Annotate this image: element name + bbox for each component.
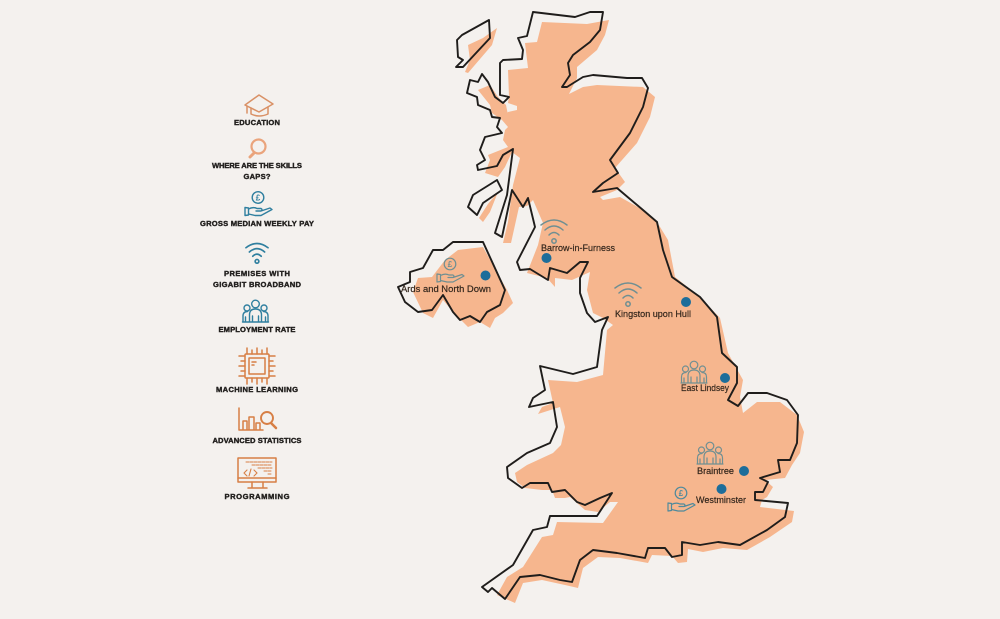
legend item: broadband [213, 244, 302, 289]
location: East Lindsey [681, 361, 730, 394]
legend item: skills gaps: GAPS? [244, 172, 271, 181]
coastline outline [398, 12, 798, 599]
icon: people [681, 361, 707, 383]
legend item: pay [200, 192, 314, 228]
legend item: broadband: PREMISES WITH [224, 269, 290, 278]
legend item: programming [224, 458, 290, 501]
location: Barrow-in-Furness: Barrow-in-Furness [541, 243, 615, 254]
legend item: education [234, 95, 280, 127]
legend item: advanced statistics [212, 408, 302, 445]
icon: wifi [541, 220, 567, 243]
location: Braintree: Braintree [697, 466, 734, 477]
icon: magnifier [250, 140, 266, 157]
icon: chip [239, 348, 275, 384]
icon: wifi [246, 244, 268, 263]
legend item: employment [218, 300, 296, 334]
icon: chart and magnifier [239, 408, 276, 430]
location: Kingston upon Hull [615, 283, 691, 320]
icon: pay hand: £ [448, 260, 453, 269]
legend [200, 95, 314, 501]
location: Braintree [697, 442, 749, 477]
location: Ards and North Down: Ards and North Down [401, 284, 491, 295]
location: Barrow-in-Furness [541, 220, 615, 263]
map fill [413, 20, 804, 603]
location: East Lindsey: East Lindsey [681, 383, 729, 394]
legend item: pay: GROSS MEDIAN WEEKLY PAY [200, 219, 314, 228]
legend item: advanced statistics: ADVANCED STATISTICS [212, 436, 302, 445]
legend item: employment: EMPLOYMENT RATE [218, 325, 296, 334]
map of the UK [398, 12, 804, 603]
icon: monitor with code [238, 458, 276, 488]
icon: wifi [615, 283, 641, 306]
legend item: programming: PROGRAMMING [224, 492, 290, 501]
legend item: skills gaps [212, 140, 302, 181]
legend item: machine learning: MACHINE LEARNING [216, 385, 298, 394]
location: Kingston upon Hull: Kingston upon Hull [615, 309, 691, 320]
location: Ards and North Down [401, 258, 491, 295]
location: Westminster [668, 484, 747, 511]
icon: people [697, 442, 723, 464]
legend item: skills gaps: WHERE ARE THE SKILLS [212, 161, 302, 170]
legend item: education: EDUCATION [234, 118, 280, 127]
legend item: machine learning [216, 348, 298, 394]
legend item: broadband: GIGABIT BROADBAND [213, 280, 302, 289]
icon: people [242, 300, 268, 322]
location: Westminster: Westminster [696, 495, 747, 506]
icon: graduation cap [245, 95, 273, 116]
icon: hand with coin: £ [256, 194, 261, 202]
icon: pay hand: £ [679, 489, 684, 498]
